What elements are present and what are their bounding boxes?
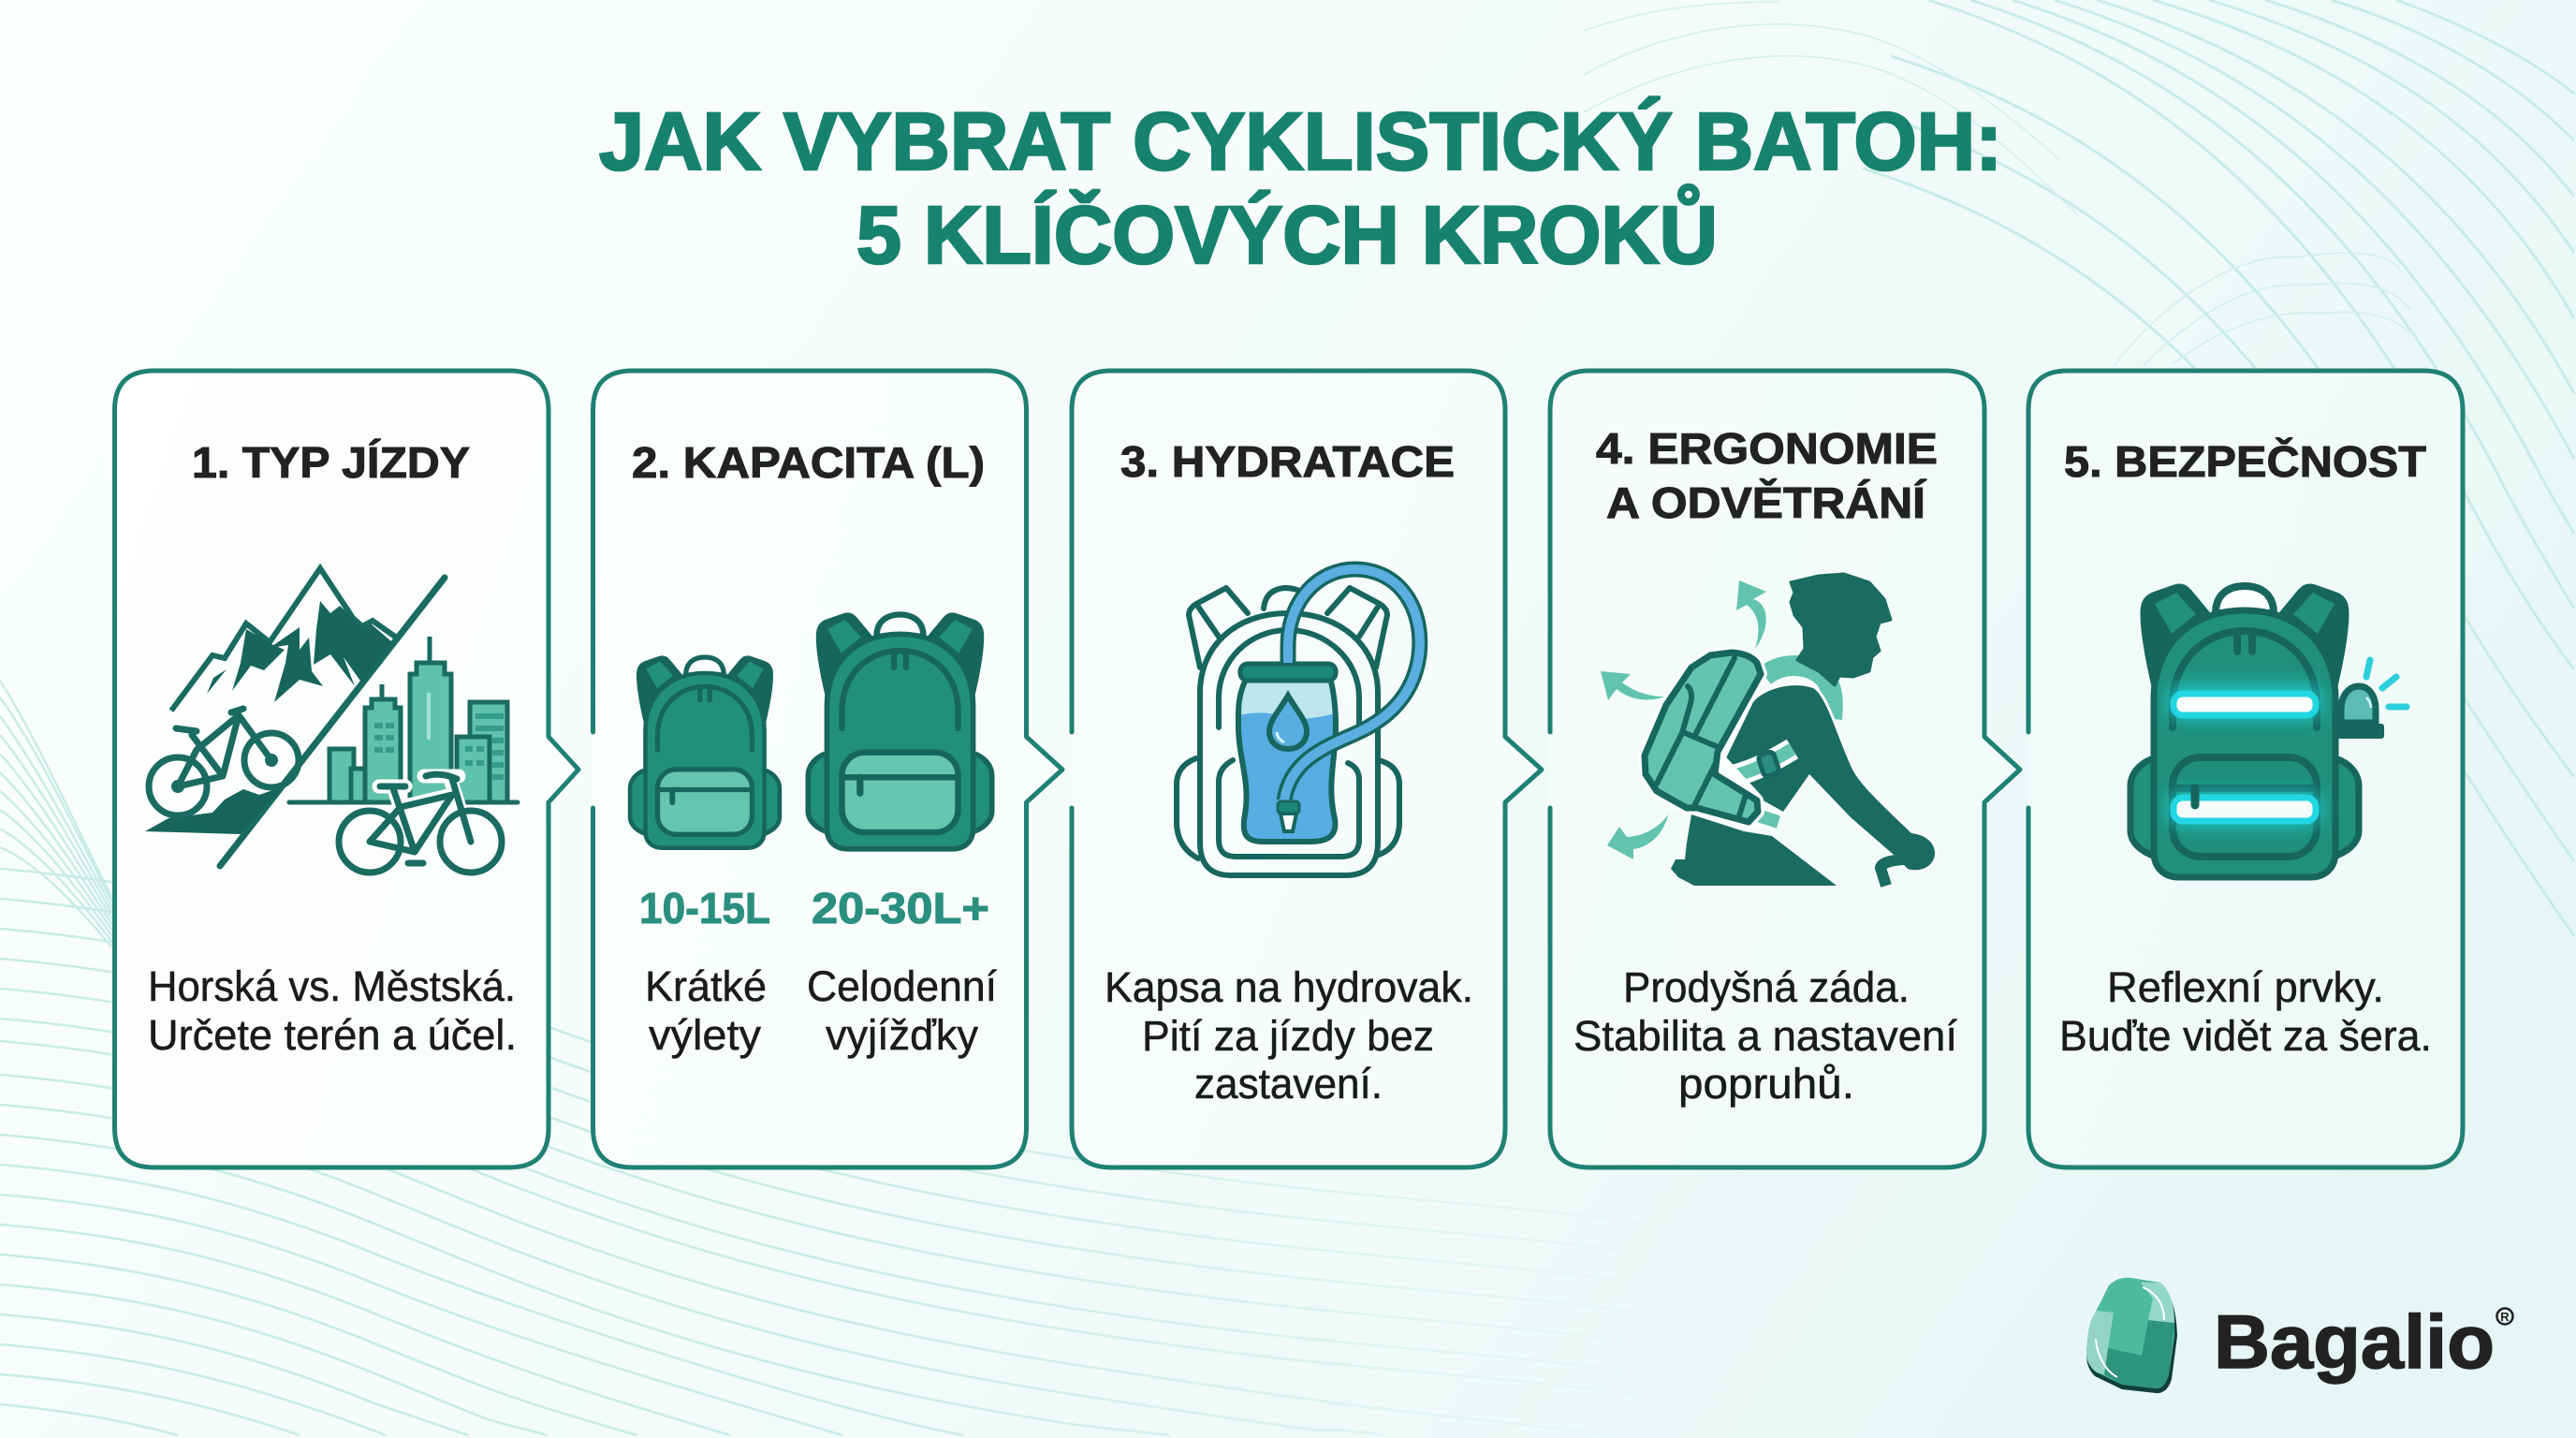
title: JAK VYBRAT CYKLISTICKÝ BATOH: (599, 96, 2002, 187)
icon: reflective backpack and light (2130, 586, 2407, 877)
description (2059, 963, 2432, 1060)
heading: 4. ERGONOMIE (1596, 424, 1938, 473)
description: Celodenní (807, 962, 997, 1010)
title (599, 96, 2002, 281)
description: Prodyšná záda. (1623, 963, 1910, 1011)
description (645, 962, 997, 1059)
description: Určete terén a účel. (148, 1011, 517, 1059)
logo gem (2086, 1278, 2177, 1393)
heading (1596, 424, 1938, 527)
description: Horská vs. Městská. (148, 962, 516, 1010)
description (1573, 963, 1958, 1108)
card outline (593, 371, 1062, 1167)
description: vyjížďky (826, 1011, 978, 1059)
capacity labels: 20-30L+ (812, 884, 989, 932)
description: Krátké (645, 962, 767, 1010)
description: zastavení. (1194, 1060, 1383, 1108)
card outline (1072, 371, 1542, 1167)
icon: mountain and city bikes (145, 568, 518, 873)
heading: 5. BEZPEČNOST (2064, 437, 2426, 486)
description: Reflexní prvky. (2107, 963, 2384, 1011)
description: Buďte vidět za šera. (2059, 1012, 2432, 1060)
panel: 3 hydratace (1072, 371, 1542, 1167)
registered mark: R (2500, 1310, 2510, 1324)
registered mark (2497, 1309, 2512, 1324)
capacity labels (639, 884, 989, 932)
card outline (2028, 371, 2463, 1167)
panel: 1 typ jízdy (114, 371, 578, 1167)
heading: A ODVĚTRÁNÍ (1606, 478, 1926, 527)
title: 5 KLÍČOVÝCH KROKŮ (856, 184, 1718, 281)
heading: 2. KAPACITA (L) (632, 438, 985, 487)
card outline (114, 371, 578, 1167)
description (148, 962, 517, 1059)
heading: 1. TYP JÍZDY (192, 438, 470, 487)
heading: 3. HYDRATACE (1120, 437, 1455, 486)
icon: cyclist with ventilated backpack (1601, 574, 1935, 886)
description: Pití za jízdy bez (1142, 1012, 1434, 1060)
logo wordmark: Bagalio (2214, 1300, 2495, 1385)
description: Kapsa na hydrovak. (1105, 963, 1473, 1011)
logo: Bagalio (2086, 1278, 2512, 1393)
card outline (1550, 371, 2020, 1167)
icon: small backpack (630, 657, 780, 848)
description (1105, 963, 1473, 1108)
panel: 2 kapacita (593, 371, 1062, 1167)
description: Stabilita a nastavení (1573, 1012, 1958, 1060)
capacity labels: 10-15L (639, 884, 770, 932)
panel: 4 ergonomie (1550, 371, 2020, 1167)
description: popruhů. (1678, 1060, 1854, 1108)
panel: 5 bezpečnost (2028, 371, 2463, 1167)
icon: large backpack (808, 614, 992, 849)
icon: hydration backpack (1177, 569, 1420, 875)
description: výlety (649, 1011, 762, 1059)
